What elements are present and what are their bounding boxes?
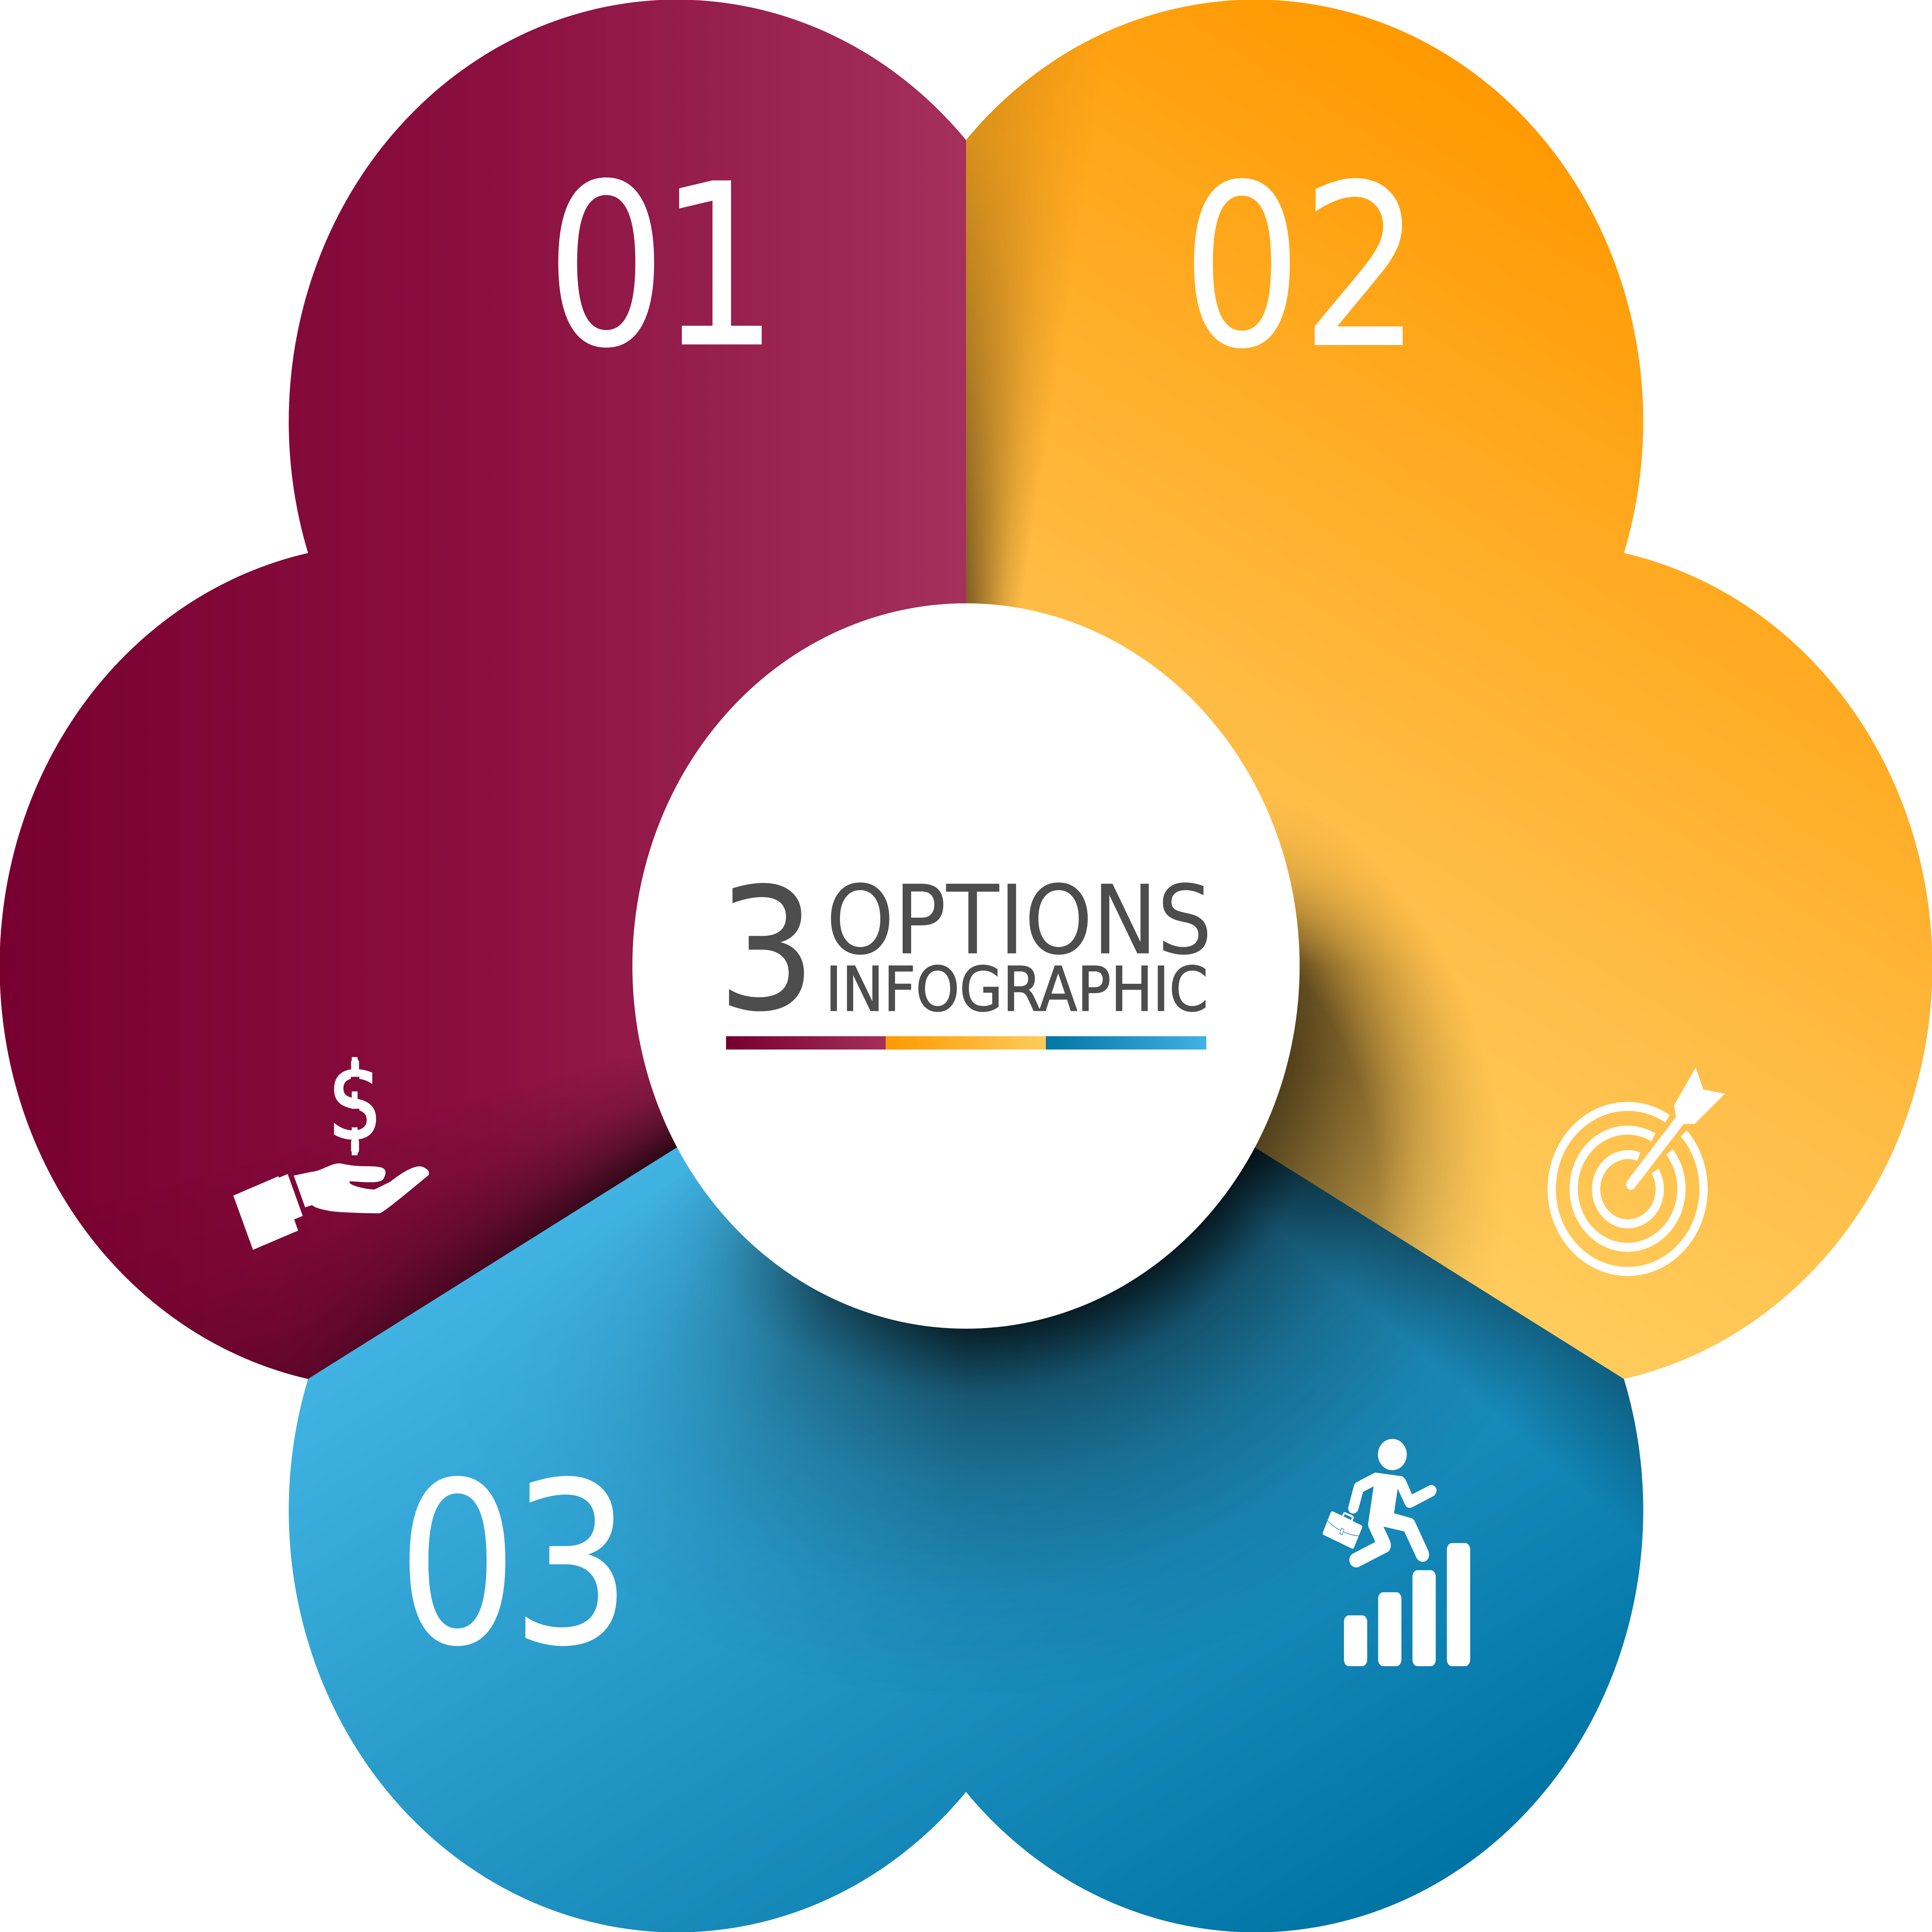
icon: hand holding dollar bbox=[233, 1040, 429, 1250]
dollar sign: $ bbox=[328, 1040, 383, 1164]
title: 3 options infographic bbox=[717, 851, 1212, 1049]
tri-colour legend bar bbox=[726, 1036, 1206, 1049]
number 01: 01 bbox=[546, 136, 779, 398]
petal shape 03 bbox=[289, 966, 1643, 1932]
number 02: 02 bbox=[1182, 137, 1422, 398]
panel: centre title circle bbox=[633, 603, 1299, 1329]
panel: option 01 crimson petal bbox=[0, 0, 966, 1379]
panel: option 03 blue petal bbox=[289, 1147, 1643, 1932]
heading: options: OPTIONS bbox=[826, 865, 1212, 976]
panel: option 02 orange petal bbox=[966, 0, 1932, 1379]
petal shape 01 bbox=[0, 0, 966, 1379]
dollar sign bbox=[334, 1057, 376, 1155]
petal shape 02 bbox=[966, 0, 1932, 1379]
large numeral 3: 3 bbox=[717, 851, 816, 1049]
number 03: 03 bbox=[397, 1435, 632, 1696]
heading: infographic: INFOGRAPHIC bbox=[825, 954, 1208, 1025]
icon: businessman climbing bar chart bbox=[1323, 1439, 1470, 1666]
icon: target with arrow bbox=[1552, 1068, 1725, 1272]
